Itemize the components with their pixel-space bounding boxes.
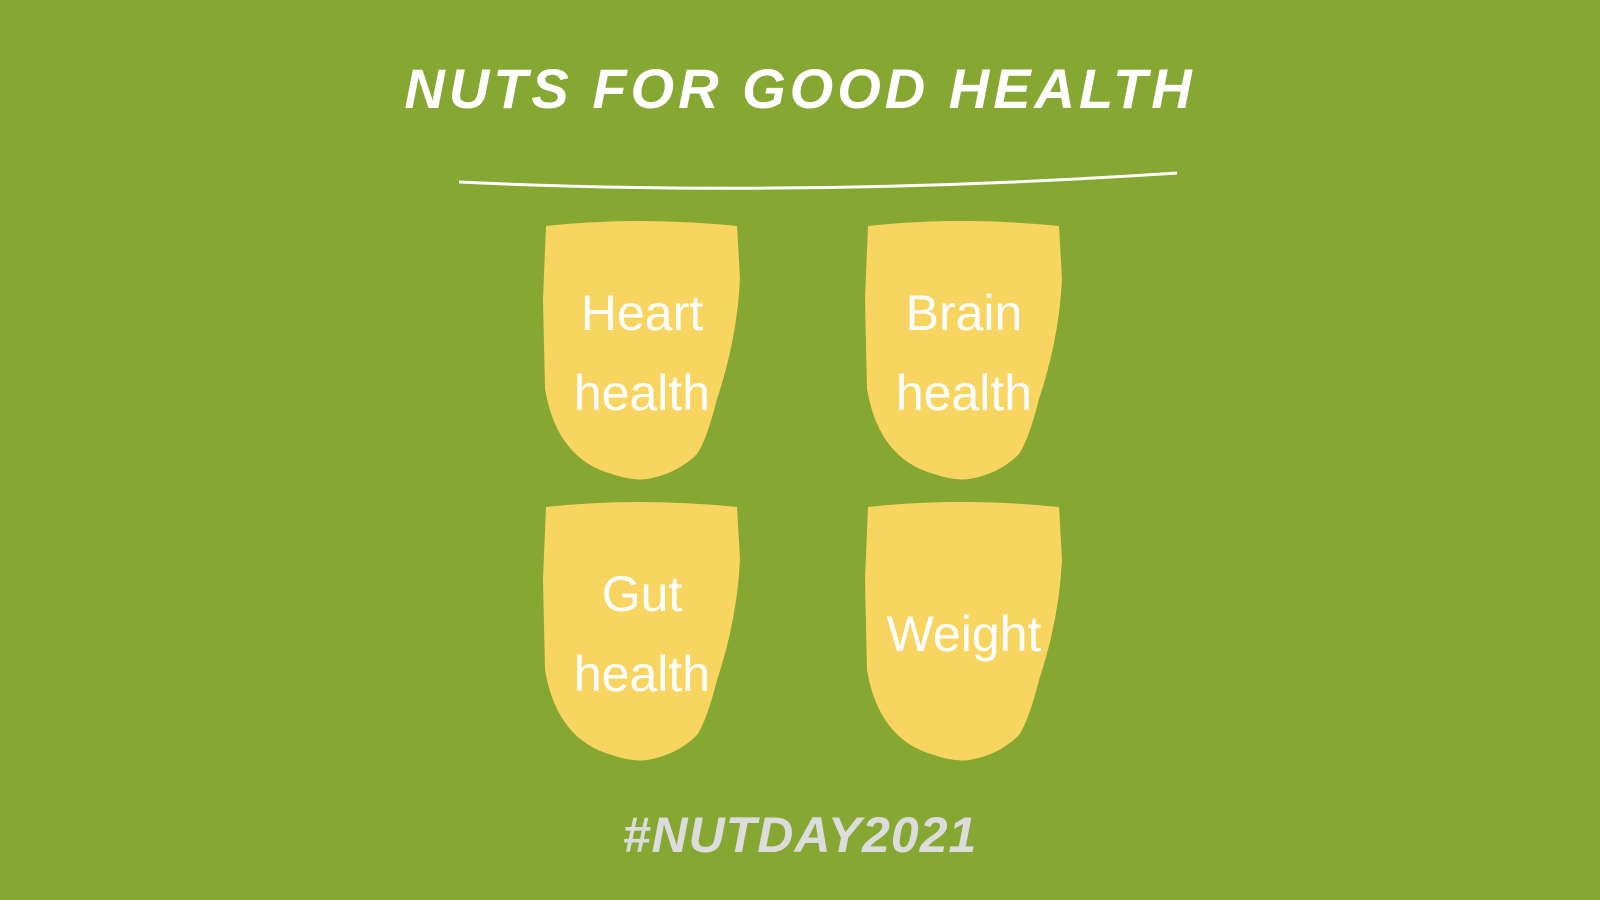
panel: heart health: health xyxy=(574,365,710,421)
panel: gut health: health xyxy=(574,646,710,702)
panel: gut health: Gut xyxy=(602,566,682,622)
panel: weight xyxy=(865,502,1062,760)
panel: brain health xyxy=(865,221,1062,480)
title: NUTS FOR GOOD HEALTH xyxy=(404,57,1196,120)
panel: weight: Weight xyxy=(887,606,1041,662)
panel: brain health: health xyxy=(896,365,1032,421)
panel: heart health xyxy=(543,221,740,480)
panel: heart health: Heart xyxy=(581,285,703,341)
underline stroke xyxy=(458,172,1178,190)
panel: gut health xyxy=(543,502,740,760)
panel: brain health: Brain xyxy=(906,285,1022,341)
hashtag: #NUTDAY2021 xyxy=(623,807,977,863)
